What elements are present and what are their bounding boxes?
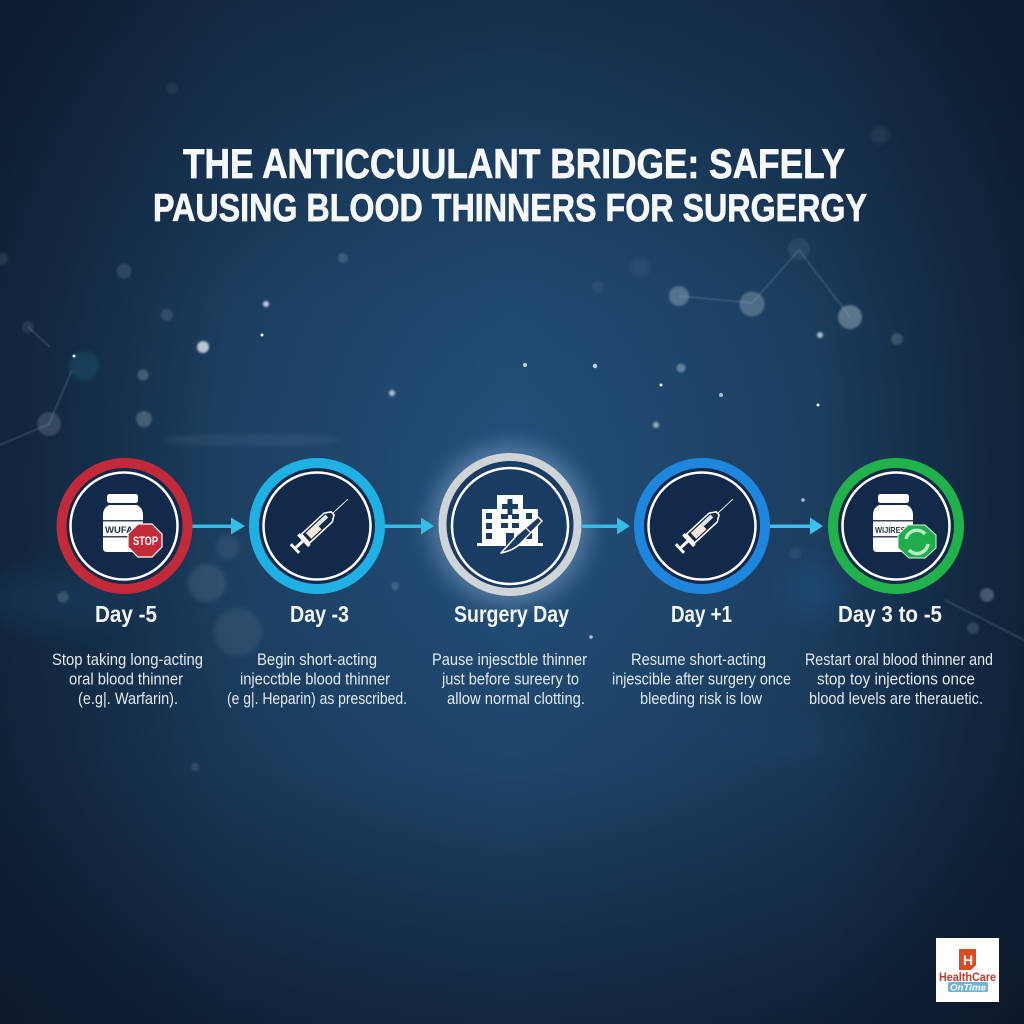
description: day 3 to -5: Restart oral blood thinner and [805,650,993,669]
description: day -3 [227,650,407,708]
icon: green ring with bottle and refresh badge [833,463,959,589]
icon: H shield: H [963,952,973,968]
description: day -3: (e g|. Heparin) as prescribed. [227,689,407,708]
description: day -5 [52,650,203,708]
logo: HealthCare OnTime: OnTime [950,982,987,994]
logo: HealthCare OnTime [936,938,999,1002]
heading: day -3: Day -3 [290,601,349,627]
description: day 3 to -5: stop toy injections once [817,670,975,688]
heading: day 3 to -5: Day 3 to -5 [838,601,942,627]
arrow: day -5 to day -3 [192,518,245,534]
step 1: day -5 [52,463,203,708]
icon: green ring with bottle and refresh badge: WIJIRESB [875,525,911,535]
description: day -3: injecctble blood thinner [240,670,390,688]
icon: blue ring with syringe [639,463,765,589]
step 3: surgery day [432,457,587,708]
description: day 3 to -5: blood levels are therauetic. [809,689,983,708]
icon: red ring with bottle and stop sign: STOP [133,536,158,548]
description: surgery day: Pause injesctble thinner [432,650,587,669]
description: day -5: oral blood thinner [69,670,183,688]
description: day +1: injescible after surgery once [612,670,791,688]
network lines and bokeh dots [0,82,1024,771]
heading: surgery day: Surgery Day [454,601,569,627]
description: day -5: (e.g|. Warfarin). [78,689,178,708]
icon: silver ring with hospital and scalpel [442,457,578,592]
title: THE ANTICCUULANT BRIDGE: SAFELY [183,140,845,187]
icon: cyan ring with syringe [254,463,380,589]
description: day +1: Resume short-acting [631,650,766,669]
description: surgery day: just before sureery to [441,670,579,688]
step 5: day 3 to -5 [805,463,993,708]
step 2: day -3 [227,463,407,708]
title: PAUSING BLOOD THINNERS FOR SURGERGY [153,187,867,230]
title [153,140,867,230]
description: day 3 to -5 [805,650,993,708]
heading: day -5: Day -5 [95,601,157,627]
description: day -5: Stop taking long-acting [52,650,203,669]
description: surgery day [432,650,587,708]
description: day +1 [612,650,791,708]
description: day +1: bleeding risk is low [640,689,763,708]
heading: day +1: Day +1 [671,601,732,627]
logo: HealthCare OnTime: HealthCare [939,970,996,984]
icon: red ring with bottle and stop sign: WUFAM [105,525,141,535]
description: surgery day: allow normal clotting. [447,689,585,708]
step 4: day +1 [612,463,791,708]
arrow: surgery day to day +1 [582,518,630,534]
arrow: day -3 to surgery day [384,518,434,534]
description: day -3: Begin short-acting [257,650,377,669]
icon: red ring with bottle and stop sign [62,463,188,589]
arrow: day +1 to day 3 to -5 [769,518,823,534]
